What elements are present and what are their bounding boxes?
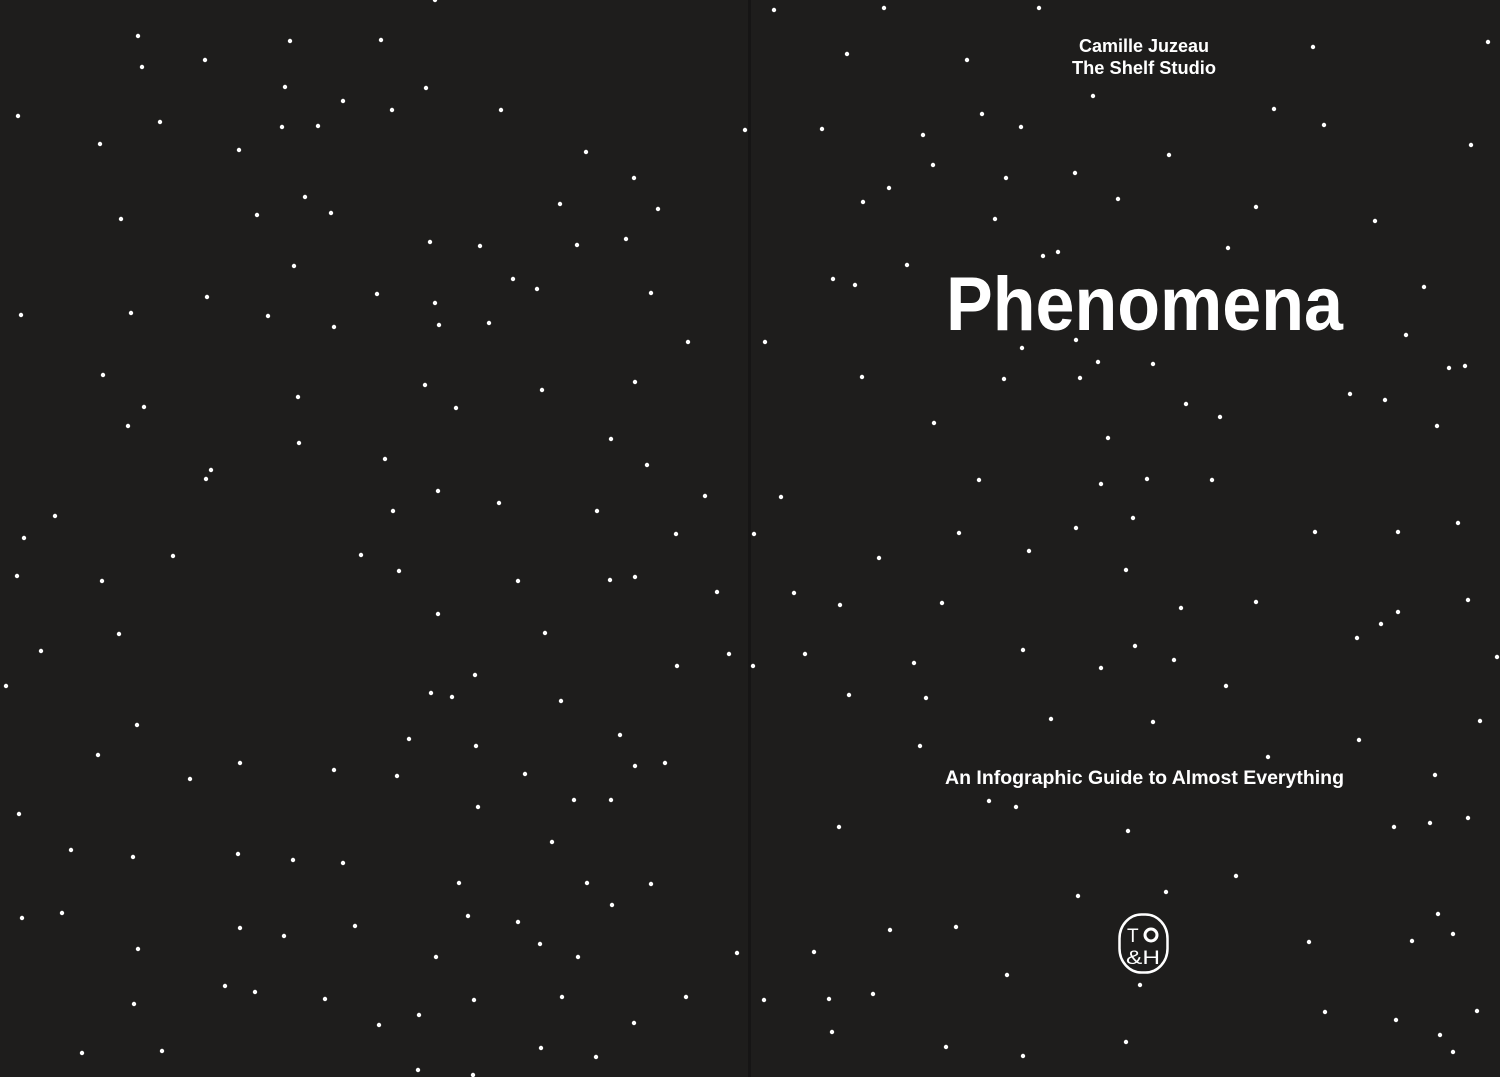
subtitle: An Infographic Guide to Almost Everything — [945, 768, 1344, 789]
icon: publisher logo T&H — [1120, 914, 1168, 972]
title: Phenomena — [946, 262, 1344, 347]
authors: The Shelf Studio — [1072, 58, 1216, 78]
authors — [1072, 36, 1216, 78]
icon: publisher logo T&H: T — [1127, 926, 1139, 947]
authors: Camille Juzeau — [1079, 36, 1209, 56]
icon: publisher logo T&H: &H — [1126, 948, 1160, 969]
